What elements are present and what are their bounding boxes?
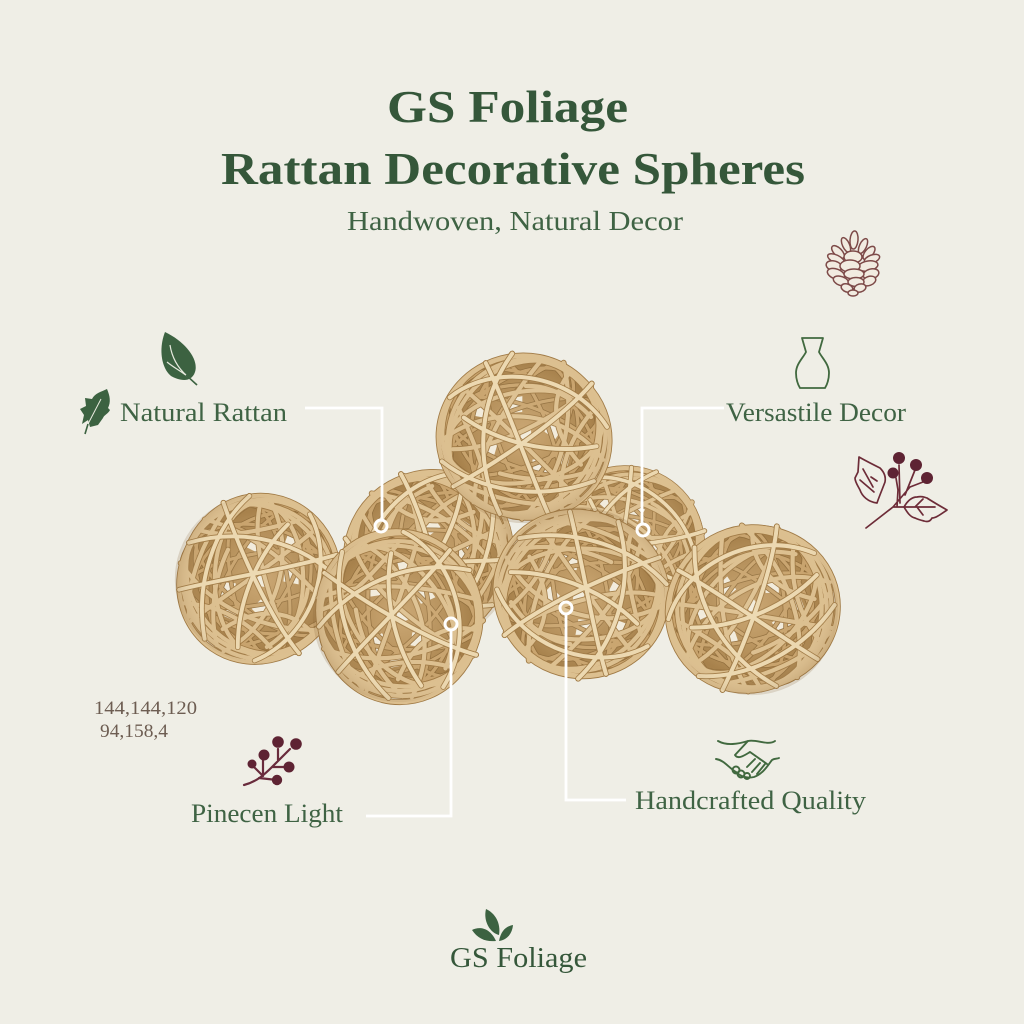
- title: [221, 81, 805, 194]
- subtitle: Handwoven, Natural Decor: [347, 206, 683, 236]
- sphere: top: [399, 315, 645, 558]
- footer logo: [450, 909, 587, 974]
- icon: pinecone: [825, 231, 881, 296]
- sphere: front center: [447, 459, 719, 730]
- label: Versastile Decor: Versastile Decor: [726, 398, 906, 427]
- label: Natural Rattan: Natural Rattan: [120, 398, 287, 427]
- icon: leafy branch with berries: [855, 452, 947, 528]
- sphere: back right: [493, 408, 760, 674]
- icon: handshake: [716, 741, 779, 779]
- stray numbers: 144,144,120: [94, 698, 197, 719]
- product: rattan spheres: [128, 315, 891, 750]
- sphere: left: [128, 445, 391, 710]
- icon: lobed leaf: [80, 389, 110, 434]
- sphere: back left: [283, 413, 571, 702]
- icon: solid leaf: [161, 332, 198, 385]
- title: Rattan Decorative Spheres: [221, 143, 805, 194]
- leader line: Versastile Decor: [637, 408, 724, 536]
- icon: footer leaves: [472, 909, 513, 941]
- stray numbers: [94, 698, 197, 742]
- leader line: Pinecen Light: [366, 618, 457, 816]
- leader line: Handcrafted Quality: [560, 602, 626, 800]
- sphere: right: [610, 470, 891, 750]
- title: GS Foliage: [387, 81, 628, 132]
- leader line: Natural Rattan: [305, 408, 387, 532]
- stray numbers: 94,158,4: [100, 721, 169, 742]
- brand name: GS Foliage: [450, 942, 587, 974]
- label: Handcrafted Quality: Handcrafted Quality: [635, 786, 866, 815]
- icon: vase: [796, 338, 829, 388]
- sphere: front left: [270, 484, 527, 744]
- label: Pinecen Light: Pinecen Light: [191, 799, 344, 828]
- icon: berry branch: [244, 736, 302, 785]
